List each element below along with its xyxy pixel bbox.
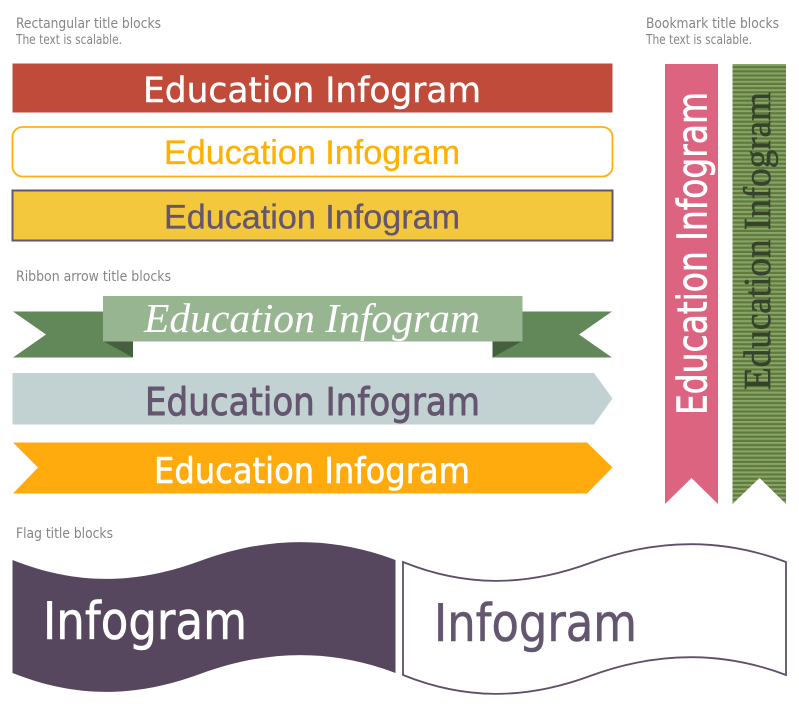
pink bookmark title block: Education Infogram	[668, 92, 716, 415]
red rectangular title block	[12, 64, 612, 112]
pale blue arrow title block	[12, 373, 612, 424]
heading: rectangular title blocks: The text is scalable.	[15, 33, 122, 48]
heading: bookmark title blocks: The text is scalable.	[645, 33, 752, 48]
yellow rectangular title block with purple outline	[12, 190, 612, 240]
heading: flag title blocks: Flag title blocks	[16, 526, 113, 542]
orange arrow title block	[13, 442, 612, 494]
green ribbon title block	[13, 295, 612, 358]
ribbon left fold	[103, 341, 133, 358]
white rounded title block with orange outline: Education Infogram	[164, 134, 460, 172]
heading: ribbon arrow title blocks: Ribbon arrow title blocks	[16, 269, 171, 285]
ribbon left tail	[13, 312, 133, 358]
orange arrow title block: Education Infogram	[154, 451, 470, 492]
ribbon text: Education Infogram	[143, 295, 480, 341]
heading: bookmark title blocks: Bookmark title blocks	[646, 16, 779, 32]
outlined flag title block	[403, 544, 786, 694]
ribbon main band	[103, 296, 522, 342]
filled purple flag title block: Infogram	[43, 592, 247, 652]
pale blue arrow title block: Education Infogram	[145, 380, 480, 424]
heading: rectangular title blocks: Rectangular title blocks	[16, 16, 161, 32]
striped green bookmark title block: Education Infogram	[737, 92, 779, 390]
heading: bookmark title blocks	[645, 16, 779, 48]
ribbon right fold	[492, 341, 522, 358]
red rectangular title block: Education Infogram	[143, 71, 481, 111]
outlined flag title block: Infogram	[434, 594, 637, 654]
heading: rectangular title blocks	[15, 16, 161, 48]
white rounded title block with orange outline	[12, 127, 612, 176]
pink bookmark title block	[665, 64, 718, 504]
ribbon right tail	[492, 312, 612, 358]
striped green bookmark title block	[732, 64, 786, 504]
yellow rectangular title block with purple outline: Education Infogram	[164, 198, 460, 236]
filled purple flag title block	[12, 542, 396, 692]
